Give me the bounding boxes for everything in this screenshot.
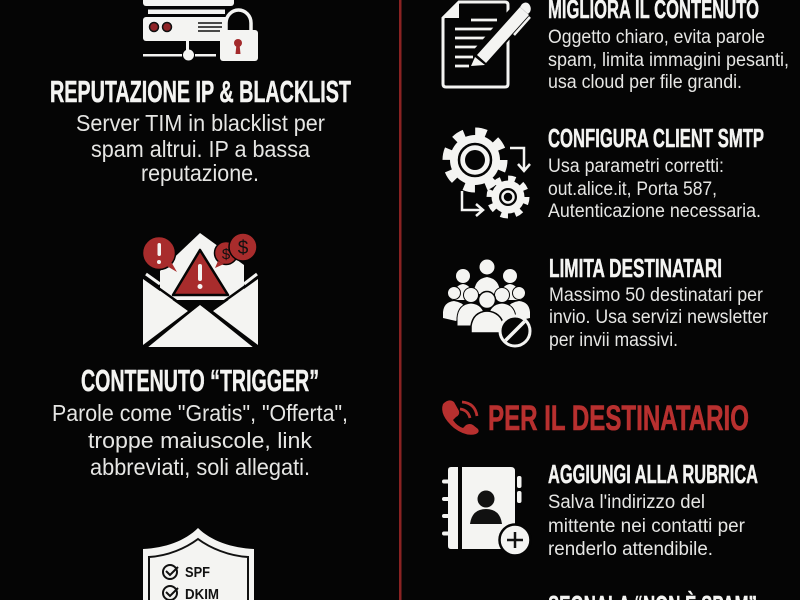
text: rubrica advice: renderlo attendibile. (548, 539, 713, 560)
text: rubrica advice: mittente nei contatti per (548, 516, 746, 537)
text: reputazione description: spam altrui. IP a bassa (91, 136, 310, 162)
text: contenuto advice: usa cloud per file grandi. (548, 72, 742, 93)
panel: left column causes (50, 0, 351, 600)
text: rubrica advice (548, 492, 746, 560)
heading: reputazione IP: REPUTAZIONE IP & BLACKLIST (50, 74, 351, 109)
text: SMTP advice: Usa parametri corretti: (548, 156, 724, 177)
icon: address book with plus (444, 467, 530, 556)
icon: red phone (442, 400, 479, 435)
icon: shield with SPF and DKIM (143, 528, 254, 600)
text: destinatari advice: Massimo 50 destinatari per (549, 285, 764, 306)
text: trigger description (52, 400, 348, 480)
text: SMTP advice: Autenticazione necessaria. (548, 201, 761, 222)
icon: envelope with warning (142, 233, 258, 348)
heading: contenuto trigger: CONTENUTO “TRIGGER” (81, 363, 319, 398)
text: SMTP advice (548, 156, 761, 222)
text: destinatari advice: per invii massivi. (549, 330, 678, 351)
text: trigger description: troppe maiuscole, link (88, 428, 313, 453)
panel: right column advice (442, 0, 789, 600)
icon: shield with SPF and DKIM: SPF (185, 564, 210, 581)
text: contenuto advice (548, 27, 789, 93)
icon: gears with arrows (448, 133, 530, 216)
icon: group of people with prohibition (443, 260, 530, 346)
icon: envelope with warning: $ (222, 246, 231, 263)
icon: document and pen (443, 2, 531, 87)
text: trigger description: Parole come "Gratis", "Offerta", (52, 400, 348, 426)
text: destinatari advice: invio. Usa servizi newsletter (549, 307, 769, 328)
text: contenuto advice: Oggetto chiaro, evita parole (548, 27, 765, 48)
icon: server with padlock (143, 0, 258, 61)
icon: envelope with warning: $ (238, 238, 249, 259)
text: reputazione description: Server TIM in blacklist per (76, 110, 325, 136)
text: SMTP advice: out.alice.it, Porta 587, (548, 179, 717, 200)
text: trigger description: abbreviati, soli allegati. (90, 454, 310, 480)
text: rubrica advice: Salva l'indirizzo del (548, 492, 705, 513)
text: contenuto advice: spam, limita immagini pesanti, (548, 50, 789, 71)
text: reputazione description: reputazione. (141, 160, 259, 186)
text: destinatari advice (549, 285, 769, 351)
text: reputazione description (76, 110, 325, 186)
